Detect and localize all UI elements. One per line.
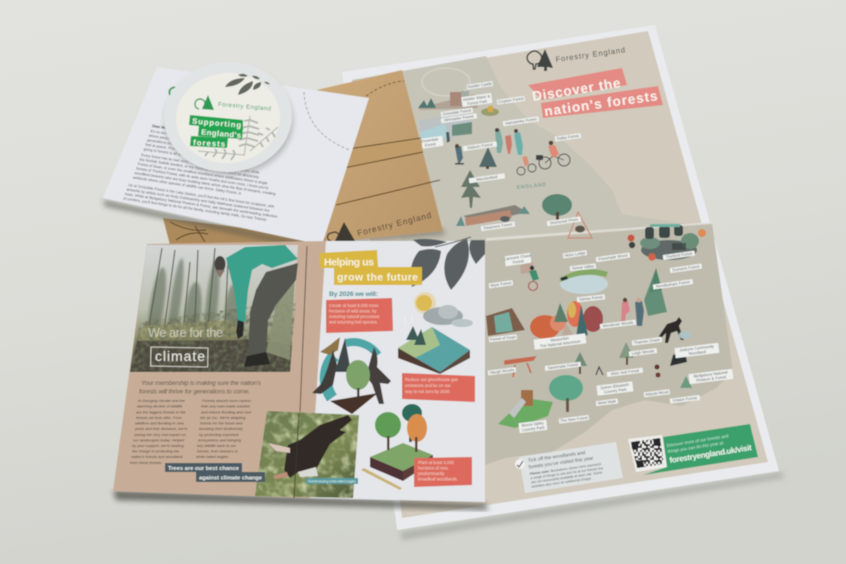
sticker title: forests bbox=[193, 138, 226, 149]
glove bbox=[236, 320, 244, 339]
red box: broadleaf woodlands bbox=[414, 457, 472, 487]
wildlife silhouettes bbox=[312, 350, 337, 394]
column two text: than any man-made solution bbox=[201, 404, 250, 409]
sticker title: Supporting bbox=[192, 117, 242, 130]
booklet shadow bbox=[113, 490, 488, 510]
photo texture bbox=[130, 300, 296, 372]
column one text: the charge in protecting the bbox=[132, 449, 180, 454]
label: The New Forest: The New Forest bbox=[560, 415, 589, 423]
photo: white-tailed eagle bbox=[255, 411, 359, 498]
column one text: wildfires and flooding to new bbox=[135, 421, 185, 426]
illustration: picnic bench bbox=[505, 357, 535, 377]
tick icon bbox=[515, 459, 525, 469]
callout: trees are our best chance: Trees are our best chance bbox=[168, 466, 240, 472]
first paragraph: feel at peace. From woodland walks to wildlife spotting, some bbox=[145, 143, 245, 161]
sticker logo: Forestry England bbox=[218, 102, 271, 113]
note small print: are not necessarily available at each site. Some bbox=[531, 471, 603, 485]
photo caption: Reintroducing white-tailed eagles bbox=[308, 478, 356, 484]
illustration: sherwood oak and tipi bbox=[542, 194, 592, 238]
intro text: Your membership is making sure the nation's bbox=[141, 380, 262, 387]
illustration: tree planting block bbox=[361, 404, 433, 490]
label: Cannock Chase bbox=[504, 253, 532, 266]
illustration: people walking bbox=[446, 128, 523, 165]
column two text: forests for the future and bbox=[200, 421, 243, 426]
red box: wild areas: Create at least 6,000 more bbox=[329, 303, 379, 308]
column two text: the air too. We're adapting bbox=[200, 415, 246, 420]
label: Moors Valley: Moors Valley bbox=[521, 420, 544, 428]
red box: broadleaf woodlands: Plant at least 2,000 bbox=[418, 460, 455, 465]
map region: England label: ENGLAND bbox=[517, 182, 547, 191]
red box: wild areas: hectares of wild areas, by bbox=[329, 308, 377, 314]
logo: forestry england map bbox=[527, 45, 626, 71]
booklet left page bbox=[113, 241, 326, 498]
second paragraph: forests of Thetford Forest, with its wide open heaths and even more, I know you're bbox=[136, 167, 269, 190]
note small print: Illustrations shown here represent bbox=[549, 462, 601, 473]
illustration: thetford forest band bbox=[628, 224, 706, 261]
label: Gisburn Forest: Gisburn Forest bbox=[467, 142, 494, 150]
label: Fineshade Wood: Fineshade Wood bbox=[598, 252, 628, 262]
spine crease bbox=[300, 246, 307, 412]
first paragraph: where people come together, where nature thrives, where bbox=[148, 134, 242, 151]
first paragraph: It's no secret that England's forests are a truly special place bbox=[150, 129, 247, 147]
title: discover the nation's forests bbox=[528, 68, 663, 119]
label: Moors Valley: Country Park bbox=[522, 425, 545, 432]
sticker: supporting england's forests bbox=[160, 58, 296, 176]
label: Savernake Forest: Savernake Forest bbox=[547, 362, 579, 370]
kraft envelope bbox=[163, 70, 446, 246]
label: Jeskyns: Jeskyns Community bbox=[679, 343, 714, 353]
note box: tick off woodlands bbox=[515, 442, 623, 493]
card shadow bbox=[103, 200, 324, 252]
red box: wild areas: and returning lost species. bbox=[329, 320, 378, 324]
red box: wild areas bbox=[326, 298, 393, 333]
red box: wild areas: restoring natural processes bbox=[329, 314, 380, 319]
column one text: our landscapes today. Helped bbox=[133, 437, 185, 442]
broadleaf tree bbox=[346, 360, 370, 390]
column two text: by protecting important bbox=[199, 432, 239, 437]
title: discover the nation's forests: Discover the bbox=[531, 75, 622, 104]
label: Kielder Castle: Kielder Castle bbox=[468, 81, 492, 89]
sticker title: England's bbox=[201, 128, 242, 140]
conifer bbox=[335, 338, 351, 372]
sticker inner disc bbox=[173, 69, 283, 167]
logo wordmark: Forestry England bbox=[555, 45, 626, 64]
label: Jeskyns: Woodland bbox=[688, 349, 706, 356]
label: Sence Valley: Sence Valley bbox=[571, 263, 594, 271]
card paper bbox=[103, 67, 369, 245]
qr code bbox=[628, 435, 667, 472]
column two text: ecosystems and bringing bbox=[198, 437, 242, 442]
label: Cannock Chase: Cannock Chase bbox=[504, 253, 532, 261]
label: West Walk: West Walk bbox=[597, 398, 616, 406]
envelope body bbox=[317, 70, 443, 243]
column two text: forests, from beavers to bbox=[197, 449, 239, 454]
third paragraph: of conifers, you'll find things to do for all the family, including family trails, Go Ape Treetop bbox=[123, 197, 267, 222]
forester jacket bbox=[226, 245, 298, 322]
label: Kielder Water: Forest Park bbox=[467, 98, 488, 106]
map beige paper bbox=[352, 31, 768, 518]
label: Cannock Chase: Forest bbox=[512, 258, 525, 265]
green website box: things you can do this year at: bbox=[667, 440, 724, 454]
column one text: pests and tree diseases, we're bbox=[134, 426, 188, 431]
illustration: wildlife cycle bbox=[312, 337, 391, 414]
column two text: white-tailed eagles. bbox=[196, 454, 229, 459]
foliage texture bbox=[255, 411, 359, 498]
map white border bbox=[342, 25, 779, 530]
pressed fern print bbox=[170, 222, 208, 242]
label: Westonbirt: The National Arboretum bbox=[539, 339, 581, 348]
label: Sherwood Pines: Sherwood Pines bbox=[549, 217, 578, 225]
sticker outer ring bbox=[160, 58, 296, 176]
label: Kielder Water: Kielder Water & bbox=[463, 93, 491, 102]
callout: trees are our best chance bbox=[165, 463, 265, 482]
photo: planting a tree bbox=[130, 245, 298, 372]
label: Jeskyns bbox=[674, 343, 719, 358]
third paragraph: trees. While at Bedgebury National Pinetum & Forest, see beneath the world-leading collection bbox=[124, 192, 278, 219]
poster map sheet bbox=[342, 25, 784, 540]
fold line bbox=[486, 222, 712, 241]
forest trunks bbox=[147, 248, 240, 347]
label: Dunwich Forest: Dunwich Forest bbox=[672, 264, 700, 272]
red box: broadleaf woodlands: predominantly bbox=[418, 471, 445, 476]
red box: broadleaf woodlands: broadleaf woodlands. bbox=[418, 476, 458, 482]
butterfly bbox=[320, 337, 340, 355]
green website box bbox=[643, 424, 758, 475]
eagle tail bbox=[268, 443, 290, 453]
label: Bedgebury: Pinetum & Forest bbox=[696, 374, 727, 383]
column one text: nation's forests and woodland bbox=[131, 454, 183, 459]
illustration: landscape block bbox=[398, 314, 470, 374]
label: Wyre Forest: Wyre Forest bbox=[490, 280, 513, 288]
label: Dalby Forest: Dalby Forest bbox=[557, 133, 580, 141]
label: Bedgebury bbox=[688, 369, 733, 384]
label: Forest of Dean: Forest of Dean bbox=[490, 334, 516, 342]
first paragraph: generations share memories and where you can breathe and bbox=[147, 138, 246, 157]
eagle white feathers bbox=[298, 467, 318, 477]
intro text: forests will thrive for generations to come. bbox=[139, 388, 250, 396]
illustration: sence valley lake bbox=[560, 269, 608, 294]
red box: broadleaf woodlands: hectares of new, bbox=[418, 466, 449, 470]
right-hand foliage bbox=[266, 262, 296, 360]
illustration: cyclists bbox=[517, 141, 570, 175]
map place labels bbox=[416, 81, 733, 433]
illustration: cannock chase cyclist bbox=[520, 260, 539, 290]
label: Alice Holt Forest bbox=[607, 367, 643, 377]
forester head and cap bbox=[214, 256, 226, 272]
envelope logo: Forestry England bbox=[356, 210, 433, 238]
illustration: northern castle and lakes bbox=[418, 68, 499, 145]
label: Leigh Woods: Leigh Woods bbox=[631, 348, 654, 356]
envelope shadow bbox=[325, 228, 446, 246]
climate box bbox=[151, 347, 208, 367]
second paragraph: Forest of Dean, or even the smallest woodland where wildflowers bloom a single bbox=[137, 162, 268, 185]
helping us heading: grow the future bbox=[337, 272, 418, 284]
label: Rendlesham Forest: Rendlesham Forest bbox=[656, 279, 691, 289]
label: Macclesfield Forest: Macclesfield bbox=[476, 174, 498, 182]
helping us heading: Helping us bbox=[324, 256, 374, 268]
cycle arrows bbox=[326, 356, 334, 398]
label: Whinlatter Forest: Whinlatter Forest bbox=[444, 113, 475, 123]
label: Ennerdale bbox=[416, 136, 443, 149]
label: Delamere Forest: Delamere Forest bbox=[483, 221, 513, 231]
envelope lower flap under card bbox=[163, 218, 326, 245]
third paragraph: Up at Grizedale Forest in the Lake District, you'll find the UK's first forest for sculpture, with bbox=[128, 183, 275, 209]
third paragraph: artworks by artists such as Andy Goldsworthy and Sally Matthews scattered between the bbox=[126, 188, 270, 213]
illustration: delamere cabin bbox=[456, 205, 530, 226]
label: Ennerdale: Ennerdale bbox=[420, 136, 439, 144]
label: Gisburn Forest bbox=[463, 141, 497, 151]
note heading: Tick off the woodlands and bbox=[527, 450, 586, 464]
second paragraph: wetlands where other species of wildlife can thrive. Dalby Forest, in bbox=[132, 176, 241, 196]
label: Queen Elizabeth Country Park: Country Park bbox=[604, 387, 627, 394]
forest canopy masses bbox=[144, 258, 241, 344]
label: Westonbirt bbox=[534, 333, 586, 350]
label: Macclesfield Forest bbox=[469, 173, 505, 183]
red box: net zero: way to net zero by 2030. bbox=[405, 389, 451, 394]
second paragraph: woodland beavers who are busy building dams which slow the flow of streams, creating bbox=[134, 171, 276, 196]
column two text: key wildlife back to our bbox=[197, 443, 237, 448]
eagle body and wing bbox=[284, 415, 352, 478]
label: Alice Holt Forest: Alice Holt Forest bbox=[610, 368, 640, 376]
base plate bbox=[330, 393, 378, 414]
envelope flap band bbox=[344, 139, 423, 168]
column one text: seeing the very real impact on bbox=[134, 432, 186, 437]
column two text: Forests absorb more carbon bbox=[202, 398, 251, 403]
column one text: forests we look after. From bbox=[136, 415, 183, 420]
label: Ennerdale: Forest bbox=[424, 141, 437, 148]
by 2026 heading: By 2026 we will: bbox=[329, 291, 378, 298]
label: Moors Valley bbox=[518, 420, 547, 433]
lower panel tone bbox=[440, 223, 733, 470]
label: Salcey Forest: Salcey Forest bbox=[579, 294, 604, 302]
booklet bbox=[113, 237, 488, 510]
illustration: forest of dean shelter bbox=[486, 308, 525, 336]
illustration: conifers upper map bbox=[461, 147, 497, 208]
eagle talons bbox=[273, 472, 288, 479]
label: Friston Forest: Friston Forest bbox=[673, 395, 698, 403]
booklet right page bbox=[310, 241, 485, 502]
sticker title bbox=[189, 115, 243, 149]
england land shape bbox=[352, 56, 733, 470]
forest floor bbox=[130, 336, 292, 372]
label: Queen Elizabeth Country Park: Queen Elizabeth bbox=[600, 382, 629, 390]
map shadow bbox=[400, 472, 784, 540]
label: Wendover Woods: Wendover Woods bbox=[602, 320, 634, 328]
label: Grizedale Forest: Grizedale Forest bbox=[442, 107, 472, 116]
sticker leaves bbox=[225, 74, 270, 95]
note small print: Please note: bbox=[530, 469, 550, 476]
label: Abbots Wood: Abbots Wood bbox=[645, 389, 669, 397]
helping us heading bbox=[320, 250, 422, 285]
label: Haugh Woods: Haugh Woods bbox=[489, 367, 514, 375]
illustration: thames chase dog bbox=[659, 317, 684, 343]
red box: net zero: Reduce our greenhouse gas bbox=[405, 377, 458, 382]
label: Thetford Forest: Thetford Forest bbox=[665, 251, 693, 259]
first paragraph: Dear Member, bbox=[152, 124, 176, 132]
callout: trees are our best chance: against climate change bbox=[199, 476, 263, 482]
envelope logo bbox=[327, 210, 433, 243]
label: Queen Elizabeth Country Park bbox=[596, 381, 633, 396]
illustration: wendover walkers bbox=[621, 298, 644, 326]
leaf sprig bbox=[411, 237, 485, 290]
column one text: alarming decline of wildlife bbox=[137, 404, 183, 409]
card logo fragment bbox=[169, 87, 178, 96]
spine line over photo bbox=[294, 414, 299, 498]
column two text: and reduce flooding and cool bbox=[201, 409, 251, 414]
illustration: moors valley play tower and new forest tree bbox=[498, 375, 583, 428]
note small print: a range of things to see and do at our forests but bbox=[530, 466, 603, 480]
second paragraph: the Norfolk Suffolk borders, or the National Arboretum, you'll be absolutely bbox=[139, 158, 259, 179]
sticker shadow bbox=[165, 67, 293, 175]
label: Hamsterley Forest: Hamsterley Forest bbox=[505, 116, 538, 126]
label: Hicks Lodge: Hicks Lodge bbox=[564, 250, 586, 258]
label: Kielder Water bbox=[461, 93, 492, 107]
climate box: climate bbox=[155, 348, 205, 364]
red box: net zero bbox=[402, 373, 475, 402]
column two text: boosting their biodiversity bbox=[199, 426, 244, 431]
forester trousers bbox=[248, 263, 298, 358]
title: discover the nation's forests: nation's forests bbox=[543, 88, 658, 119]
dashed path on card bbox=[304, 92, 350, 150]
photo title: We are for the bbox=[148, 326, 223, 340]
dashed path on envelope bbox=[366, 81, 404, 96]
column one text: are the biggest threats to the bbox=[136, 409, 186, 414]
label: Bedgebury: Bedgebury National bbox=[693, 369, 728, 379]
label: Westonbirt: Westonbirt bbox=[550, 335, 570, 343]
green website box: forestryengland.uk/visit bbox=[669, 443, 753, 465]
boot bbox=[244, 352, 270, 367]
sticker fern bbox=[198, 116, 278, 160]
illustration: sun and cloud bbox=[414, 292, 473, 327]
label: Thames Chase: Thames Chase bbox=[633, 337, 660, 345]
illustration: rendlesham pine bbox=[644, 268, 667, 316]
column one text: from these threats. bbox=[130, 460, 162, 465]
card body text bbox=[123, 123, 279, 223]
illustration: westonbirt arboretum trees bbox=[530, 301, 603, 341]
label: Cropton Forest: Cropton Forest bbox=[498, 96, 525, 104]
green website box: Discover more of our forests and bbox=[666, 433, 729, 448]
red box: net zero: emissions and be on our bbox=[405, 383, 451, 388]
envelope fold lines bbox=[336, 138, 440, 205]
white membership card bbox=[103, 58, 369, 252]
note heading: forests you've visited this year bbox=[528, 455, 594, 471]
first paragraph: going to forests is all about escaping, thriving and enjoying. bbox=[143, 147, 239, 165]
grasses bbox=[138, 320, 244, 341]
second paragraph: Every forest has its own story. Each is unique. Take time to explore, while bbox=[141, 153, 260, 175]
logo mark bbox=[527, 49, 553, 71]
illustration: jeskyns and small trees bbox=[573, 331, 692, 388]
column one text: A changing climate and the bbox=[137, 398, 186, 403]
note small print: activities also incur an additional charge. bbox=[531, 476, 592, 489]
column one text: by your support, we're leading bbox=[132, 443, 185, 448]
